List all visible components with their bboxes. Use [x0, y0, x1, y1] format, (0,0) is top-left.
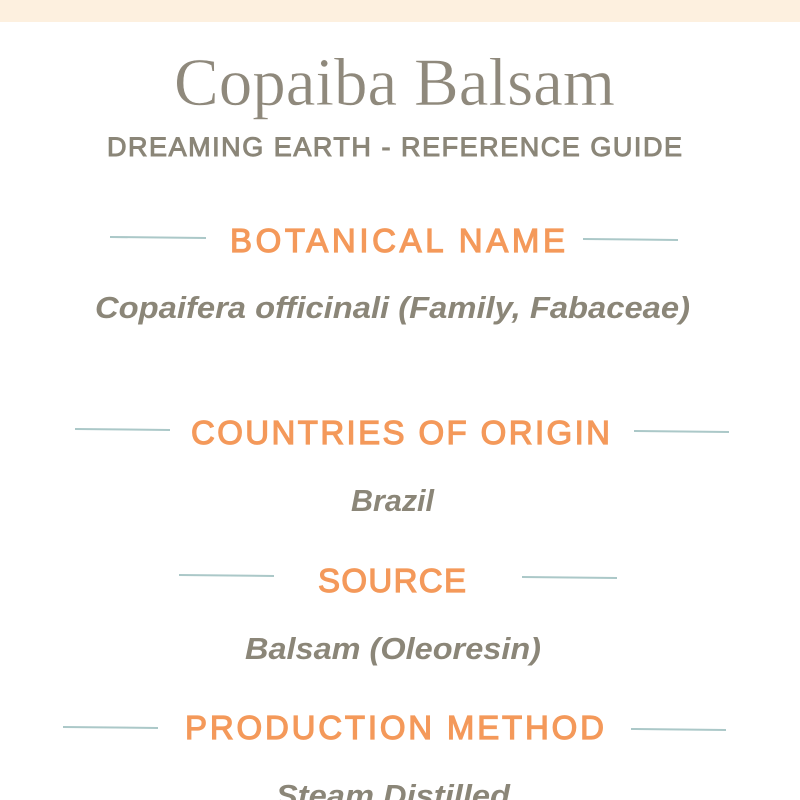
section: countries of origin: [75, 414, 729, 518]
text: botanical name value: Copaifera officinali (Family, Fabaceae): [95, 290, 690, 325]
top banner: [0, 0, 800, 22]
section: production method: [63, 709, 726, 800]
section: botanical name: [95, 222, 690, 325]
text: countries value: Brazil: [351, 483, 435, 518]
section: source: [179, 562, 617, 666]
heading: production method: PRODUCTION METHOD: [185, 709, 604, 746]
text: source value: Balsam (Oleoresin): [245, 631, 541, 666]
title: Copaiba Balsam: [174, 44, 615, 120]
heading: source: SOURCE: [318, 562, 466, 599]
heading: countries of origin: COUNTRIES OF ORIGIN: [191, 414, 610, 451]
heading: botanical name: BOTANICAL NAME: [230, 222, 565, 259]
subtitle: DREAMING EARTH - REFERENCE GUIDE: [107, 132, 682, 162]
